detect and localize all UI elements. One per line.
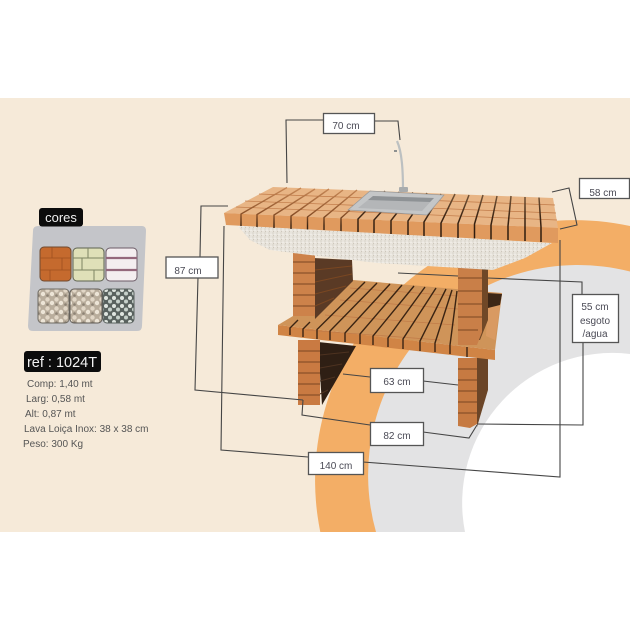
- shelf: [278, 280, 502, 360]
- colour options panel: [28, 208, 146, 331]
- dimension: 82 cm: [302, 400, 477, 446]
- dimension: 63 cm: 63 cm: [383, 377, 411, 388]
- dimension: 70 cm: [286, 114, 400, 183]
- dimension: 55 cm drain / water: /agua: [582, 329, 608, 340]
- dimension: 55 cm drain / water: esgoto: [580, 316, 610, 327]
- product reference and specifications: [23, 351, 149, 450]
- background band: [0, 98, 630, 532]
- spec list: Larg: 0,58 mt: [26, 394, 85, 405]
- countertop: [224, 187, 558, 243]
- spec list: Comp: 1,40 mt: [27, 379, 93, 390]
- front right upper leg: [458, 263, 488, 345]
- dimension: 140 cm: 140 cm: [320, 461, 352, 472]
- spec list: Peso: 300 Kg: [23, 439, 83, 450]
- dimension: 58 cm: [552, 178, 630, 229]
- dimension: 70 cm: 70 cm: [332, 121, 360, 132]
- rear left leg: [293, 251, 353, 319]
- dimension: 87 cm: [166, 206, 303, 400]
- dimension: 82 cm: 82 cm: [383, 431, 411, 442]
- spec list: Lava Loiça Inox: 38 x 38 cm: [24, 424, 149, 435]
- spec list: [23, 379, 149, 450]
- stucco underside: [237, 225, 552, 270]
- dimension: 140 cm: [221, 226, 560, 477]
- dimension: 87 cm: 87 cm: [174, 266, 202, 277]
- dimension: 63 cm: [343, 368, 458, 392]
- tap: [394, 141, 408, 192]
- dimension: 58 cm: 58 cm: [589, 188, 617, 199]
- ref tag: ref : 1024T: [27, 355, 97, 371]
- colour swatch card: [28, 226, 146, 331]
- cores tag: cores: [45, 210, 77, 225]
- stainless steel sink: [348, 191, 444, 215]
- lower right leg: [458, 355, 488, 428]
- brick sink unit: [224, 141, 558, 428]
- spec list: Alt: 0,87 mt: [25, 409, 76, 420]
- dimension: 55 cm drain / water: 55 cm: [581, 302, 609, 313]
- dimension: 55 cm drain / water: [398, 273, 618, 425]
- lower left leg: [298, 340, 356, 405]
